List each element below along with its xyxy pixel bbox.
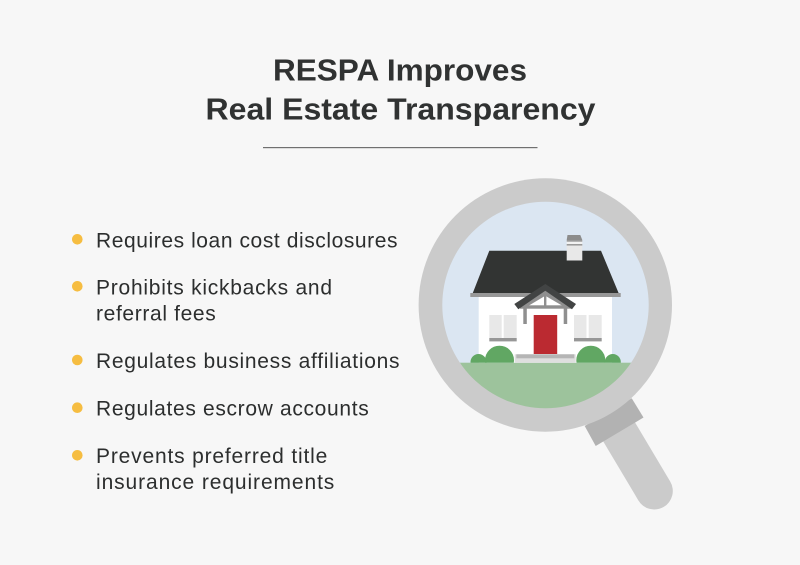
right window	[574, 315, 602, 341]
icon: magnifying glass with house	[419, 178, 672, 491]
list item: loan cost disclosures: Requires loan cost disclosures	[96, 229, 398, 252]
title	[206, 53, 596, 126]
magnifier handle	[615, 425, 654, 491]
list item: business affiliations: Regulates business affiliations	[96, 350, 400, 373]
porch posts	[523, 306, 527, 324]
bullet list	[72, 229, 400, 494]
list item: kickbacks and referral fees	[72, 277, 332, 326]
house	[470, 235, 621, 375]
porch gable	[514, 284, 576, 309]
list item: kickbacks and referral fees: referral fees	[96, 303, 216, 326]
roof	[473, 251, 619, 293]
left window	[489, 315, 517, 341]
eave	[470, 293, 621, 297]
steps	[515, 354, 576, 363]
walls	[479, 296, 612, 363]
door	[534, 315, 557, 354]
lens scene	[440, 200, 652, 411]
list item: title insurance: insurance requirements	[96, 471, 334, 494]
list item: title insurance	[72, 445, 334, 494]
lawn	[460, 362, 631, 408]
list item: escrow accounts: Regulates escrow accounts	[96, 397, 369, 420]
title: RESPA Improves	[273, 53, 527, 88]
title underline	[263, 147, 538, 148]
bushes	[470, 346, 621, 363]
sky	[440, 200, 652, 364]
title: Real Estate Transparency	[206, 92, 596, 126]
magnifier ring	[419, 178, 672, 432]
list item: title insurance: Prevents preferred title	[96, 445, 327, 468]
chimney	[567, 235, 582, 260]
list item: kickbacks and referral fees: Prohibits kickbacks and	[96, 277, 332, 300]
magnifier collar	[585, 398, 644, 446]
